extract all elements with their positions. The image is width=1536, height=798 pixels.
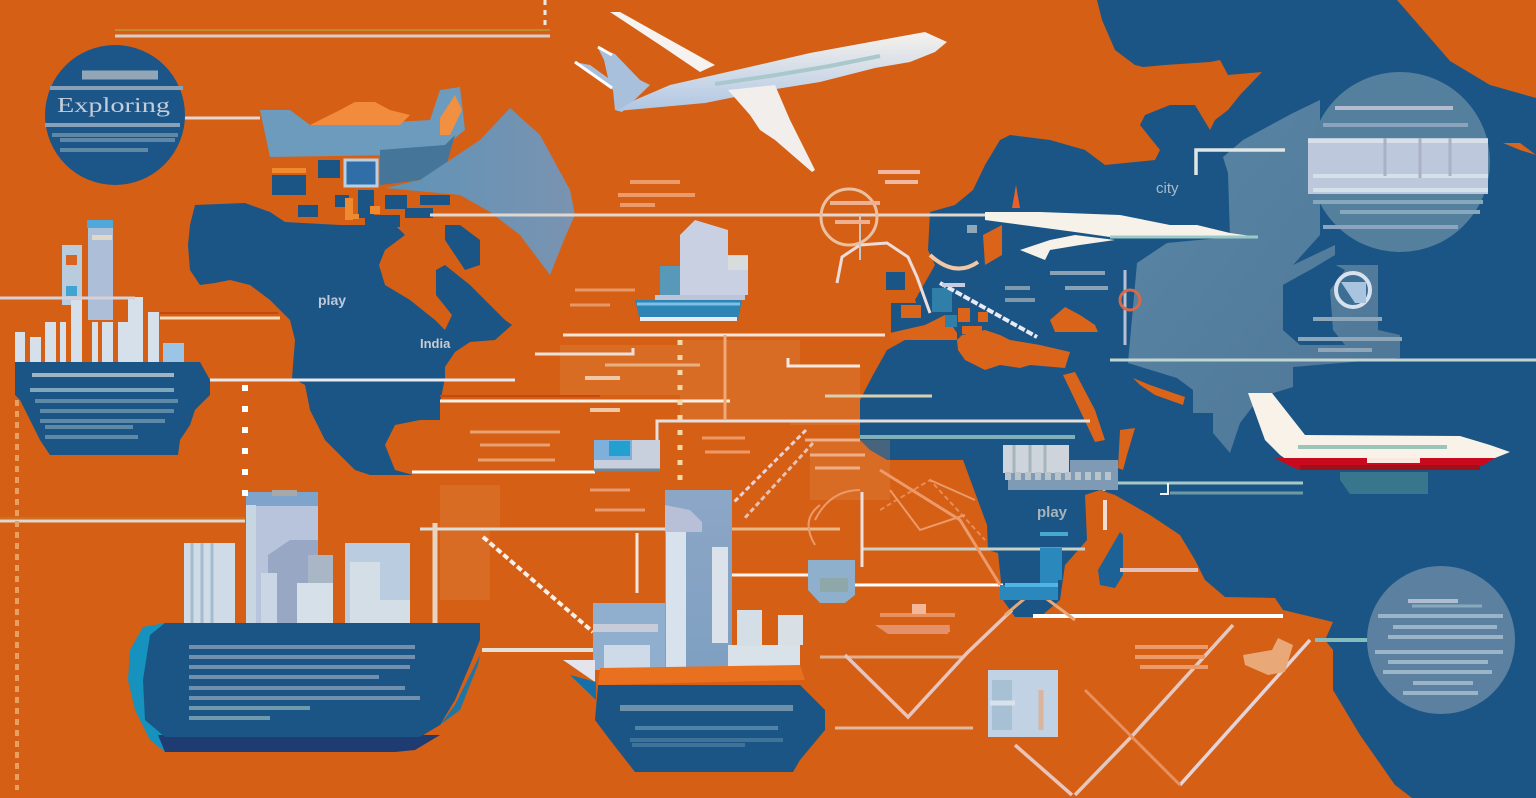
icon: badge with ring <box>1298 273 1402 350</box>
map: eurasia, africa and oceans <box>860 0 1536 798</box>
panel: top left circle with title <box>45 45 185 185</box>
arctic islands <box>272 160 450 227</box>
tail <box>574 48 650 112</box>
panel: bottom right circle <box>1367 566 1515 714</box>
teal europe shading <box>932 288 957 327</box>
document panel bottom <box>988 670 1058 737</box>
africa card <box>1003 445 1118 490</box>
wing lower <box>728 85 815 172</box>
icon: orange hand marker <box>1243 638 1293 675</box>
slate asia landmass <box>1128 100 1400 453</box>
madagascar <box>1098 532 1123 588</box>
dashed guide lines <box>17 189 1310 795</box>
ship icon <box>635 220 748 320</box>
orange coastline patches <box>890 143 1536 470</box>
orange label square blocks <box>445 225 480 270</box>
plane silhouette over greenland <box>260 87 575 275</box>
europe peninsula blocks <box>886 272 925 335</box>
labels on map: India <box>420 336 451 351</box>
panel: bottom left text card <box>128 623 480 752</box>
labels on map: play <box>1037 504 1068 521</box>
labels on map <box>318 180 1179 521</box>
small text bars on orange <box>470 172 1208 667</box>
title: Exploring <box>57 93 171 117</box>
red marker <box>1120 290 1140 310</box>
small document icon <box>594 440 660 470</box>
city skyline on left panel <box>15 220 184 362</box>
labels on map: city <box>1156 180 1179 197</box>
europe detail text bars <box>942 273 1108 300</box>
plane: top <box>574 12 947 172</box>
central city tower <box>593 490 803 670</box>
icon: small orange marker <box>875 604 950 634</box>
north america <box>188 160 512 475</box>
icon: small blue gear <box>808 560 855 603</box>
blue circle over europe <box>932 217 978 263</box>
plane: red striped jet <box>1248 393 1510 494</box>
plane: middle white jet <box>985 185 1258 260</box>
arctic orange shading <box>272 168 380 220</box>
cyan south africa <box>1000 534 1068 600</box>
fuselage <box>617 32 947 111</box>
labels on map: play <box>318 292 346 308</box>
panel: top right circle <box>1308 72 1490 252</box>
wing upper <box>610 12 715 72</box>
panel: central text card <box>563 660 825 772</box>
panel: left ship-shaped text card <box>15 362 210 455</box>
light orange overlay blocks <box>440 340 890 600</box>
city skyline bottom left <box>184 490 410 623</box>
